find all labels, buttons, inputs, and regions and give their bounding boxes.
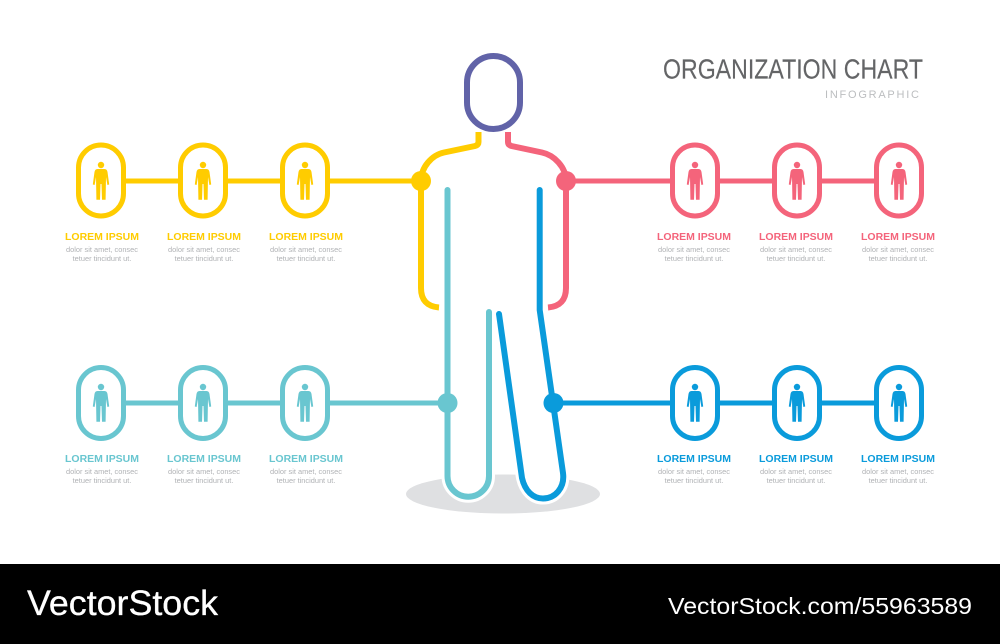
card: blue 1: tetuer tincidunt ut. (665, 476, 723, 485)
blue leg halo (516, 440, 563, 498)
card: red 1: LOREM IPSUM (657, 231, 731, 243)
card: yellow 3: LOREM IPSUM (269, 231, 343, 243)
card: red 1: tetuer tincidunt ut. (665, 254, 723, 263)
card: red 3: LOREM IPSUM (861, 231, 935, 243)
card: teal 1 (65, 368, 139, 485)
card: teal 2: dolor sit amet, consec (168, 467, 240, 476)
card: blue 2: tetuer tincidunt ut. (767, 476, 825, 485)
footer id: VectorStock.com/55963589 (668, 593, 972, 619)
footer bar (0, 564, 1000, 644)
yellow arm (421, 132, 478, 308)
card: red 2: dolor sit amet, consec (760, 245, 832, 254)
card: red 2: tetuer tincidunt ut. (767, 254, 825, 263)
teal leg halo (448, 440, 489, 497)
card: teal 1: dolor sit amet, consec (66, 467, 138, 476)
card: teal 2 (167, 368, 241, 485)
red arm (508, 132, 566, 308)
card: blue 3 (861, 368, 935, 485)
card: teal 3 (269, 368, 343, 485)
card: yellow 1 (65, 145, 139, 263)
branch: yellow (100, 171, 431, 191)
card: red 1: dolor sit amet, consec (658, 245, 730, 254)
card: blue 3: tetuer tincidunt ut. (869, 476, 927, 485)
card: teal 3: tetuer tincidunt ut. (277, 476, 335, 485)
card: red 3 (861, 145, 935, 263)
card: yellow 1: tetuer tincidunt ut. (73, 254, 131, 263)
ground shadow (406, 474, 600, 514)
card: teal 2: tetuer tincidunt ut. (175, 476, 233, 485)
head (467, 56, 520, 129)
card: blue 2 (759, 368, 833, 485)
card: blue 2: dolor sit amet, consec (760, 467, 832, 476)
card: yellow 3: dolor sit amet, consec (270, 245, 342, 254)
blue leg (499, 190, 563, 498)
card: blue 2: LOREM IPSUM (759, 453, 833, 465)
card: red 3: dolor sit amet, consec (862, 245, 934, 254)
card: blue 3: dolor sit amet, consec (862, 467, 934, 476)
branch: red (556, 171, 900, 191)
card: yellow 2: tetuer tincidunt ut. (175, 254, 233, 263)
card: teal 1: tetuer tincidunt ut. (73, 476, 131, 485)
branch: teal (100, 393, 458, 413)
card: yellow 1: LOREM IPSUM (65, 231, 139, 243)
card: blue 1: dolor sit amet, consec (658, 467, 730, 476)
card: yellow 2: LOREM IPSUM (167, 231, 241, 243)
title: ORGANIZATION CHART (663, 54, 923, 84)
card: blue 3: LOREM IPSUM (861, 453, 935, 465)
card: yellow 2 (167, 145, 241, 263)
card: teal 3: dolor sit amet, consec (270, 467, 342, 476)
card: yellow 3: tetuer tincidunt ut. (277, 254, 335, 263)
subtitle: INFOGRAPHIC (825, 89, 919, 101)
card: red 1 (657, 145, 731, 263)
card: teal 2: LOREM IPSUM (167, 453, 241, 465)
footer brand: VectorStock (27, 584, 219, 623)
card: blue 1 (657, 368, 731, 485)
card: red 2: LOREM IPSUM (759, 231, 833, 243)
card: yellow 1: dolor sit amet, consec (66, 245, 138, 254)
teal leg (448, 190, 489, 497)
card: red 2 (759, 145, 833, 263)
card: blue 1: LOREM IPSUM (657, 453, 731, 465)
branch: blue (544, 393, 900, 413)
card: yellow 2: dolor sit amet, consec (168, 245, 240, 254)
card: red 3: tetuer tincidunt ut. (869, 254, 927, 263)
card: yellow 3 (269, 145, 343, 263)
card: teal 3: LOREM IPSUM (269, 453, 343, 465)
card: teal 1: LOREM IPSUM (65, 453, 139, 465)
central human figure (421, 56, 566, 498)
